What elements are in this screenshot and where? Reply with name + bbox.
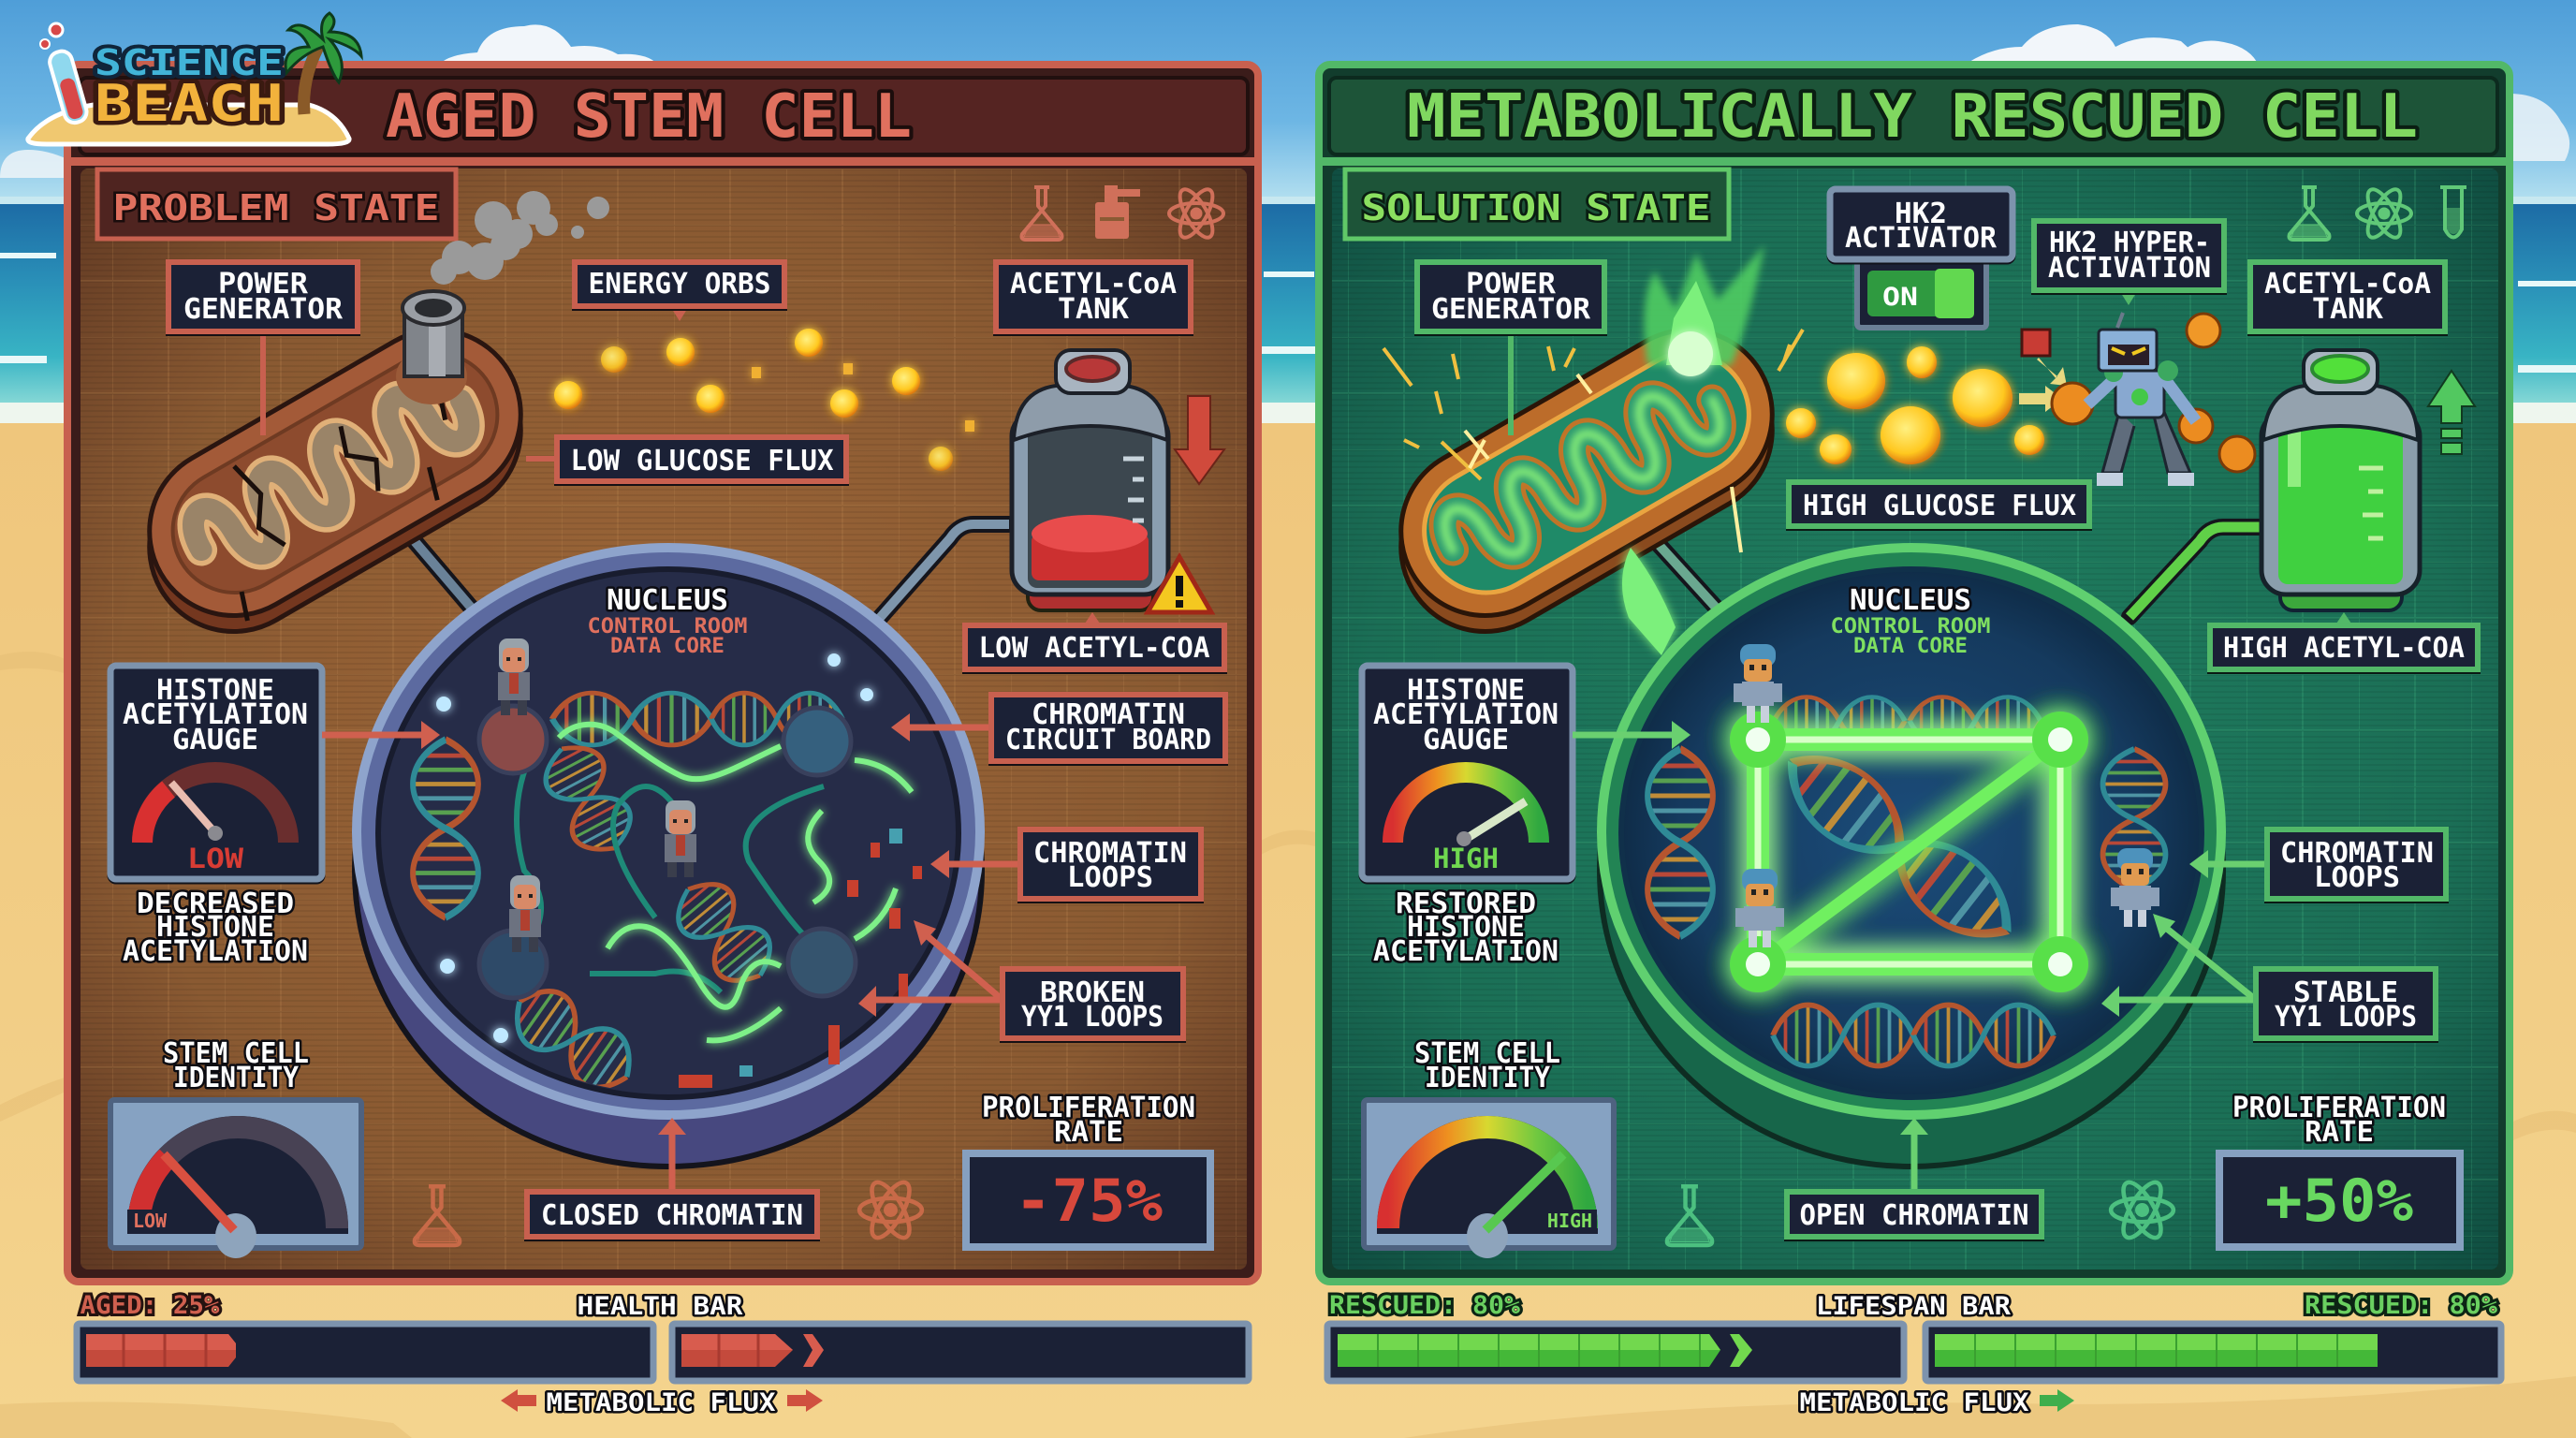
label: histone acetylation gauge green: HIGH bbox=[1433, 843, 1499, 874]
nucleus label: CONTROL ROOM bbox=[1831, 615, 1990, 638]
label: hk2 hyper-activation: HK2 HYPER- bbox=[2049, 227, 2210, 259]
switch: hk2 activator: HK2 bbox=[1895, 198, 1947, 230]
label: power generator green: POWER bbox=[1466, 268, 1557, 301]
text: decreased histone acetylation bbox=[123, 888, 308, 968]
lifespan bar left bbox=[1327, 1324, 1904, 1381]
label: metabolic flux left: METABOLIC FLUX bbox=[547, 1388, 775, 1417]
label: stem cell identity: STEM CELL bbox=[163, 1037, 309, 1070]
arrow: histone gauge to nucleus bbox=[322, 721, 440, 749]
nucleus label bbox=[588, 584, 747, 658]
icon: flask bottom bbox=[415, 1186, 460, 1245]
label: stem cell identity green bbox=[1414, 1037, 1560, 1094]
label: closed chromatin: CLOSED CHROMATIN bbox=[541, 1199, 803, 1232]
label: closed chromatin bbox=[527, 1118, 817, 1237]
switch: hk2 activator bbox=[1830, 189, 2012, 328]
label: open chromatin: OPEN CHROMATIN bbox=[1799, 1199, 2029, 1232]
gauge: stem cell identity high: HIGH bbox=[1547, 1210, 1592, 1232]
label: proliferation rate green: RATE bbox=[2305, 1116, 2374, 1149]
heading: problem state: PROBLEM STATE bbox=[112, 187, 439, 228]
panel: metabolically rescued cell bbox=[1319, 65, 2510, 1282]
label: stable yy1 loops bbox=[2101, 914, 2436, 1038]
nucleus label: DATA CORE bbox=[1853, 635, 1968, 658]
icon: flask green bbox=[2290, 187, 2329, 240]
label: stem cell identity: IDENTITY bbox=[173, 1062, 299, 1094]
label: broken yy1 loops bbox=[858, 920, 1183, 1038]
text: decreased histone acetylation: DECREASED bbox=[137, 888, 294, 920]
label: energy orbs bbox=[575, 262, 784, 321]
icon: active mitochondrion bbox=[1370, 300, 1803, 662]
title: aged stem cell: AGED STEM CELL bbox=[386, 82, 912, 152]
label: stem cell identity bbox=[163, 1037, 309, 1094]
label: high acetyl-coa: HIGH ACETYL-COA bbox=[2223, 632, 2465, 665]
icon: flask bottom green bbox=[1667, 1186, 1712, 1245]
label: acetyl-coa tank green: TANK bbox=[2312, 293, 2383, 326]
label: power generator green: GENERATOR bbox=[1431, 293, 1591, 326]
icon: spray bottle bbox=[1095, 185, 1140, 239]
pipe: tank to nucleus green bbox=[2130, 527, 2260, 617]
label: acetyl-coa tank bbox=[996, 262, 1191, 331]
label: broken yy1 loops: BROKEN bbox=[1040, 976, 1145, 1009]
worker: sleeping scientist bottom bbox=[509, 875, 541, 952]
label: histone acetylation gauge bbox=[110, 666, 322, 879]
label: chromatin loops: CHROMATIN bbox=[1033, 837, 1187, 870]
worker: repairing scientist bbox=[665, 800, 696, 877]
label: low glucose flux bbox=[526, 437, 846, 481]
label: chromatin circuit board bbox=[891, 695, 1225, 761]
logo: science beach bbox=[28, 13, 361, 144]
label: power generator: POWER bbox=[218, 268, 309, 301]
label: proliferation rate: PROLIFERATION bbox=[982, 1092, 1195, 1124]
arrow: tank rising bbox=[2428, 371, 2475, 454]
label: histone acetylation gauge: LOW bbox=[187, 843, 244, 874]
icon: green vent flame bbox=[1622, 548, 1676, 655]
label: energy orbs: ENERGY ORBS bbox=[588, 268, 771, 301]
icon: atom bottom green bbox=[2111, 1177, 2174, 1243]
pipe: tank to nucleus bbox=[879, 524, 1009, 619]
label: health bar: HEALTH BAR bbox=[577, 1292, 743, 1321]
icon: test tube green bbox=[2440, 187, 2466, 238]
stable yy1 loop frame bbox=[1730, 712, 2088, 992]
label: histone acetylation gauge: GAUGE bbox=[172, 724, 258, 756]
switch: hk2 activator: ON bbox=[1882, 283, 1918, 312]
icon: energy orbs bbox=[554, 329, 974, 471]
label: chromatin loops green: LOOPS bbox=[2314, 861, 2400, 894]
label: open chromatin bbox=[1787, 1118, 2042, 1237]
label: rescued 80% left: RESCUED: 80% bbox=[1329, 1291, 1521, 1320]
circuit nodes bbox=[479, 706, 856, 998]
text: decreased histone acetylation: HISTONE bbox=[156, 911, 274, 944]
label: chromatin circuit board: CHROMATIN bbox=[1032, 698, 1185, 731]
label: aged 25%: AGED: 25% bbox=[80, 1291, 220, 1320]
icon: atom bbox=[1169, 184, 1223, 242]
gauge: stem cell identity high bbox=[1364, 1100, 1614, 1258]
label: low acetyl-coa bbox=[965, 612, 1224, 669]
arrow: tank falling bbox=[1175, 396, 1224, 484]
glowing green chromatin loops bbox=[559, 725, 912, 1040]
label: broken yy1 loops: YY1 LOOPS bbox=[1021, 1001, 1164, 1034]
label: power generator: GENERATOR bbox=[183, 293, 344, 326]
healthy dna bbox=[1647, 697, 2165, 1066]
label: rescued 80% right: RESCUED: 80% bbox=[2305, 1291, 2498, 1320]
label: proliferation rate green bbox=[2232, 1092, 2446, 1149]
nucleus label: DATA CORE bbox=[610, 635, 724, 658]
stat: proliferation -75%: -75% bbox=[1015, 1167, 1163, 1235]
nucleus label bbox=[1831, 584, 1990, 658]
blue sparks bbox=[436, 653, 873, 1043]
label: chromatin loops bbox=[930, 829, 1201, 899]
label: histone acetylation gauge: ACETYLATION bbox=[123, 698, 308, 731]
text: restored histone acetylation: ACETYLATION bbox=[1373, 935, 1559, 968]
text: restored histone acetylation bbox=[1373, 888, 1559, 968]
label: lifespan bar: LIFESPAN BAR bbox=[1816, 1292, 2012, 1321]
stat: proliferation +50% bbox=[2219, 1153, 2460, 1247]
icon: flask bbox=[1022, 187, 1061, 240]
text: decreased histone acetylation: ACETYLATION bbox=[123, 935, 308, 968]
health bar right bbox=[672, 1324, 1249, 1381]
worker: sleeping scientist top bbox=[498, 638, 530, 715]
logo: science beach: SCIENCE bbox=[95, 42, 284, 83]
heading: solution state: SOLUTION STATE bbox=[1361, 187, 1711, 228]
icon: low acetyl-coa tank bbox=[1012, 350, 1168, 610]
label: proliferation rate green: PROLIFERATION bbox=[2232, 1092, 2446, 1124]
pipe: mitochondrion to nucleus green bbox=[1643, 527, 1718, 609]
logo: science beach: BEACH bbox=[95, 74, 284, 133]
label: acetyl-coa tank green: ACETYL-CoA bbox=[2264, 268, 2431, 301]
icon: warning triangle bbox=[1148, 557, 1211, 612]
label: histone acetylation gauge green: HISTONE bbox=[1407, 674, 1525, 707]
gauge: stem cell identity low bbox=[110, 1100, 361, 1258]
health bar left bbox=[77, 1324, 653, 1381]
worker: technician bottom bbox=[1735, 869, 1784, 947]
arrow: orbs to robot bbox=[2019, 358, 2067, 412]
arrow: histone gauge to nucleus green bbox=[1573, 721, 1690, 749]
icon: large energy orbs bbox=[1786, 346, 2044, 464]
title: metabolically rescued cell: METABOLICALLY RESCUED CELL bbox=[1407, 82, 2418, 152]
icon: high acetyl-coa tank bbox=[2261, 350, 2420, 610]
label: power generator green bbox=[1417, 262, 1604, 435]
icon: smoke bbox=[431, 191, 609, 285]
heading: solution state bbox=[1345, 169, 1729, 239]
heading: problem state bbox=[97, 169, 456, 239]
nucleus label: NUCLEUS bbox=[607, 584, 728, 617]
label: low acetyl-coa: LOW ACETYL-COA bbox=[979, 632, 1209, 665]
label: stable yy1 loops: YY1 LOOPS bbox=[2275, 1001, 2417, 1034]
icon: green flame top bbox=[1644, 245, 1764, 376]
nucleus: control room bbox=[355, 548, 982, 1167]
label: histone acetylation gauge green: ACETYLATION bbox=[1373, 698, 1559, 731]
stat: proliferation -75% bbox=[966, 1153, 1210, 1247]
label: proliferation rate bbox=[982, 1092, 1195, 1149]
text: restored histone acetylation: HISTONE bbox=[1407, 911, 1525, 944]
nucleus: rescued control room bbox=[1600, 548, 2223, 1167]
label: histone acetylation gauge: HISTONE bbox=[156, 674, 274, 707]
chromatin and broken dna bbox=[413, 693, 842, 1102]
icon: atom green bbox=[2357, 184, 2411, 242]
stat: proliferation +50%: +50% bbox=[2265, 1167, 2413, 1235]
label: acetyl-coa tank: ACETYL-CoA bbox=[1010, 268, 1177, 301]
label: stem cell identity green: IDENTITY bbox=[1425, 1062, 1550, 1094]
label: hk2 hyper-activation bbox=[2034, 221, 2224, 305]
label: chromatin loops: LOOPS bbox=[1067, 861, 1153, 894]
label: chromatin circuit board: CIRCUIT BOARD bbox=[1005, 724, 1211, 756]
label: chromatin loops green bbox=[2189, 829, 2446, 899]
label: high acetyl-coa bbox=[2210, 612, 2478, 669]
lifespan bar right bbox=[1925, 1324, 2501, 1381]
nucleus label: CONTROL ROOM bbox=[588, 615, 747, 638]
panel: aged stem cell bbox=[67, 65, 1258, 1282]
label: stem cell identity green: STEM CELL bbox=[1414, 1037, 1560, 1070]
gauge: stem cell identity low: LOW bbox=[133, 1210, 168, 1232]
text: restored histone acetylation: RESTORED bbox=[1396, 888, 1536, 920]
switch: hk2 activator: ACTIVATOR bbox=[1845, 222, 1998, 255]
icon: sparks bbox=[1383, 330, 1803, 552]
nucleus label: NUCLEUS bbox=[1850, 584, 1971, 617]
label: power generator bbox=[168, 262, 358, 435]
worker: technician right bbox=[2111, 848, 2159, 927]
label: acetyl-coa tank: TANK bbox=[1058, 293, 1129, 326]
icon: damaged mitochondrion bbox=[119, 291, 551, 662]
broken fragments bbox=[679, 843, 922, 1088]
label: low glucose flux: LOW GLUCOSE FLUX bbox=[571, 445, 833, 477]
worker: technician top bbox=[1734, 644, 1782, 723]
label: chromatin loops green: CHROMATIN bbox=[2280, 837, 2434, 870]
label: histone acetylation gauge green bbox=[1362, 666, 1573, 879]
label: metabolic flux right: METABOLIC FLUX bbox=[1799, 1388, 2029, 1417]
icon: atom bottom bbox=[859, 1177, 922, 1243]
pipe: mitochondrion to nucleus bbox=[402, 527, 473, 609]
label: stable yy1 loops: STABLE bbox=[2293, 976, 2398, 1009]
label: hk2 hyper-activation: ACTIVATION bbox=[2048, 252, 2211, 285]
label: high glucose flux: HIGH GLUCOSE FLUX bbox=[1803, 490, 2076, 522]
icon: hk2 robot bbox=[2022, 313, 2255, 486]
label: proliferation rate: RATE bbox=[1054, 1116, 1123, 1149]
label: metabolic flux left bbox=[501, 1388, 823, 1417]
label: acetyl-coa tank green bbox=[2250, 262, 2445, 331]
label: histone acetylation gauge green: GAUGE bbox=[1423, 724, 1509, 756]
